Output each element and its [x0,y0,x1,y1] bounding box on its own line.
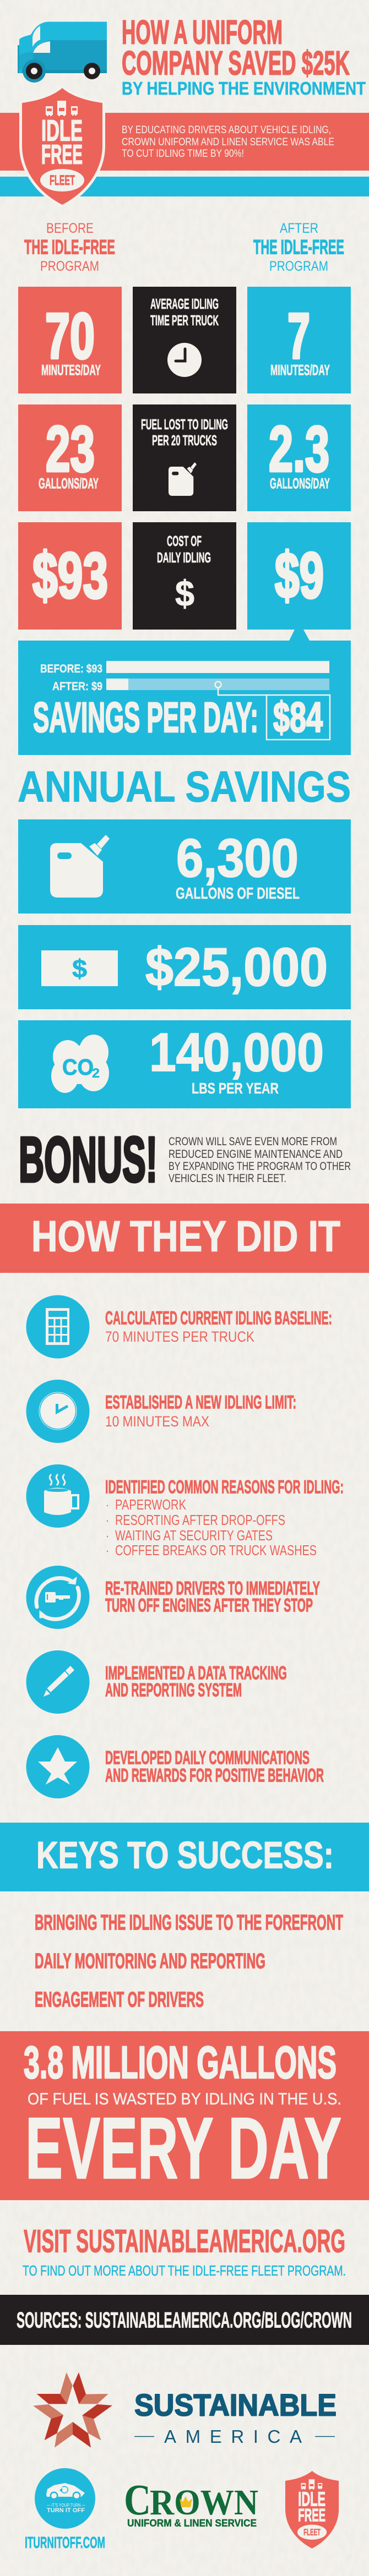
heading: after: PROGRAM [269,259,328,274]
badge: idle free fleet shield [22,88,102,205]
banner: 3.8 million gallons: OF FUEL IS WASTED BY IDLING IN THE U.S. [28,2090,341,2108]
heading: after: AFTER [280,221,318,236]
panel: dollars saved [18,925,351,1009]
icon: calculator [46,1308,69,1345]
bonus heading: BONUS! [19,1124,158,1195]
tile: after 7 minutes: 7 [287,300,310,372]
tile: before 23 gallons [18,404,122,511]
icon: three trucks [46,101,78,116]
step: data tracking [26,1650,287,1714]
callout: $84: $84 [273,694,323,741]
tile: after 2.3 gallons: 2.3 [269,413,329,485]
step: calculated baseline [26,1295,332,1358]
panel: lbs co2 per year [18,1020,351,1108]
tile: before 23 gallons: 23 [46,413,95,485]
step: data tracking: AND REPORTING SYSTEM [105,1680,242,1700]
logo: sustainable america wordmark [134,2387,337,2447]
bar chart: before and after: AFTER: $9 [52,680,102,693]
bar chart: before and after: BEFORE: $93 [40,663,102,675]
logo: turn it off: TURN IT OFF [47,2507,85,2514]
tile: cost of daily idling: DAILY IDLING [157,549,211,566]
title [122,13,366,99]
logo: crown uniform and linen service [124,2476,258,2529]
tile: cost of daily idling [133,522,236,630]
bonus text: VEHICLES IN THEIR FLEET. [169,1172,286,1185]
logo: sustainable america wordmark: AMERICA [164,2426,302,2447]
step: communications and rewards [26,1735,324,1798]
icon: star [38,1747,77,1785]
icon: car [46,2483,85,2500]
banner: 3.8 million gallons [0,2031,369,2200]
badge: idle free fleet shield: FREE [41,140,83,169]
logo: turn it off: ITURNITOFF.COM [25,2534,105,2552]
icon: co2 cloud: CO [62,1054,94,1080]
icon: gold crown [180,2496,192,2507]
tile: after 2.3 gallons [247,404,351,511]
logo: idle free fleet small shield: FLEET [303,2527,321,2537]
badge: idle free fleet shield: IDLE [41,114,83,147]
heading: before: BEFORE [46,221,94,236]
tile: before $93 [18,522,122,630]
tile: cost of daily idling: COST OF [167,533,202,549]
step: new idling limit: 10 MINUTES MAX [105,1413,209,1430]
icon: clock [39,1392,77,1430]
banner: how they did it [0,1204,369,1273]
icon: co2 cloud [51,1035,109,1093]
logo: idle free fleet small shield: IDLE [298,2488,325,2511]
step: common reasons for idling [26,1464,344,1558]
logo: idle free fleet small shield: FREE [298,2505,325,2525]
logo: crown uniform and linen service: C [124,2476,151,2524]
banner: keys to success [0,1823,369,1891]
panel: gallons of diesel [18,819,351,914]
panel: dollars saved: $25,000 [145,937,328,997]
tile: after $9 [247,522,351,630]
list: reasons: WAITING AT SECURITY GATES [115,1527,273,1544]
tile: before $93: $93 [32,539,108,611]
list: reasons: RESORTING AFTER DROP-OFFS [115,1512,285,1528]
logo: turn it off [25,2468,105,2552]
icon: dollar bill [41,950,118,986]
logo: sustainable america star [33,2372,112,2448]
logo: turn it off: — IT'S YOUR TURN — [47,2503,85,2508]
logo: crown uniform and linen service: UNIFORM & LINEN SERVICE [127,2518,257,2529]
step: new idling limit [26,1380,296,1443]
heading: before: THE IDLE-FREE [24,236,115,259]
heading: before [24,221,115,274]
icon: delivery truck [18,22,107,83]
panel: lbs co2 per year: 140,000 [149,1022,324,1082]
heading: before: PROGRAM [40,259,99,274]
intro text [122,124,334,160]
list: reasons: PAPERWORK [115,1496,186,1513]
panel: savings per day [18,630,351,755]
tile: before 70 minutes: 70 [45,300,95,372]
icon: dollar bill: $ [72,954,87,983]
tile: after 7 minutes: MINUTES/DAY [270,362,330,379]
panel: lbs co2 per year: LBS PER YEAR [192,1080,279,1097]
badge: idle free fleet shield: FLEET [50,173,75,188]
tile: before 23 gallons: GALLONS/DAY [39,475,99,492]
tile: average idling time [133,287,236,393]
panel: gallons of diesel: 6,300 [176,828,299,888]
logo: idle free fleet small shield [285,2471,339,2548]
band: blue stripe [0,177,369,196]
band: red intro [0,113,369,171]
list: reasons [107,1496,317,1558]
tile: fuel lost to idling [133,404,236,511]
list: keys to success [35,1911,343,2012]
logo: crown uniform and linen service: ROWN [150,2482,258,2523]
icon: pencil [44,1666,74,1697]
tile: after $9: $9 [275,539,324,611]
icon: co2 cloud: 2 [92,1066,100,1081]
tile: fuel lost to idling: FUEL LOST TO IDLING [141,416,228,433]
tile: average idling time: AVERAGE IDLING [150,296,219,312]
tile: fuel lost to idling: PER 20 TRUCKS [152,432,217,449]
panel: gallons of diesel: GALLONS OF DIESEL [176,885,300,903]
tile: before 70 minutes: MINUTES/DAY [41,362,101,379]
list: keys to success: ENGAGEMENT OF DRIVERS [35,1988,204,2012]
icon: dollar: $ [175,573,194,614]
heading: after [253,221,344,274]
step: re-trained drivers [26,1566,320,1629]
step: calculated baseline: 70 MINUTES PER TRUCK [105,1328,254,1345]
icon: clock [167,343,202,377]
icon: fuel can [50,835,110,898]
logo: sustainable america wordmark: SUSTAINABLE [134,2387,337,2422]
intro text: CROWN UNIFORM AND LINEN SERVICE WAS ABLE [122,136,334,148]
tile: after 7 minutes [247,287,351,393]
tile: before 70 minutes [18,287,122,393]
intro text: BY EDUCATING DRIVERS ABOUT VEHICLE IDLING, [122,124,331,136]
bar chart: before and after [40,661,329,695]
band: sources [0,2295,369,2345]
icon: key with turn arrows [36,1577,79,1619]
tile: average idling time: TIME PER TRUCK [150,312,219,329]
call to action [23,2223,346,2279]
icon: coffee mug [44,1474,78,1515]
intro text: TO CUT IDLING TIME BY 90%! [122,148,244,160]
bonus text [169,1135,351,1185]
icon: fuel can small [169,462,197,496]
